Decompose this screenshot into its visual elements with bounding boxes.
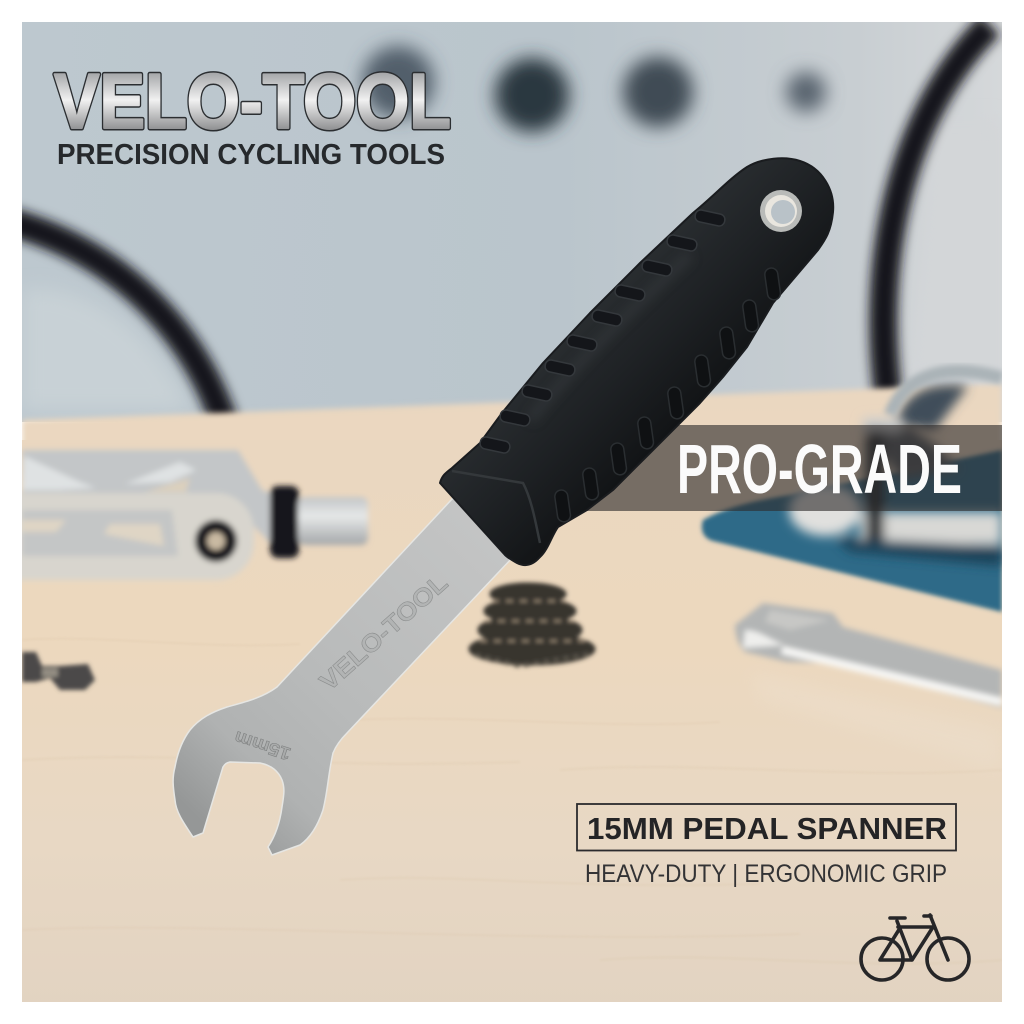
grip body	[440, 158, 833, 565]
chain link	[22, 652, 95, 690]
engraved size on head: 15mm	[232, 727, 293, 764]
collar at the base of the grip	[452, 471, 540, 543]
grip soft highlight	[530, 255, 690, 420]
tagline: PRECISION CYCLING TOOLS	[57, 139, 445, 171]
soft table reflection under wrench	[750, 672, 1000, 770]
product features: HEAVY-DUTY | ERGONOMIC GRIP	[585, 860, 947, 888]
right pedal on teal mat	[702, 371, 1002, 612]
pedal dark interior	[895, 385, 968, 430]
table surface	[22, 440, 1002, 1010]
blurred wall discs	[362, 46, 826, 132]
table top	[22, 384, 1002, 440]
teal mat	[702, 450, 1002, 612]
wood grain	[22, 639, 1002, 964]
label box	[577, 804, 956, 850]
blurred wall	[22, 22, 1002, 422]
rubber grip	[440, 158, 833, 565]
cassette cogs	[469, 583, 595, 666]
pedal silver body	[789, 418, 1002, 566]
lanyard hole	[760, 190, 802, 232]
engraved brand on shaft: VELO-TOOL	[314, 569, 453, 696]
right grip ribs	[554, 267, 781, 523]
banner: pro-grade band	[560, 425, 1002, 511]
blurred bicycle wheels	[10, 25, 990, 425]
background wrench	[735, 603, 1002, 708]
logo: VELO-TOOL: VELO-TOOL	[54, 57, 451, 145]
product label	[577, 804, 956, 850]
icon: bicycle	[861, 915, 969, 980]
logo: VELO-TOOL: VELO-TOOL	[54, 57, 451, 145]
wrench shaft and head	[173, 498, 512, 855]
pale wall right of the wheel	[905, 120, 1002, 390]
left grip ribs	[479, 209, 726, 454]
label text: 15MM PEDAL SPANNER	[587, 811, 947, 846]
left pedal	[0, 450, 368, 580]
wrench: velo-tool pedal spanner	[173, 158, 833, 855]
pedal arch	[890, 371, 1002, 415]
pale wall glow inside the wheel	[28, 294, 177, 406]
